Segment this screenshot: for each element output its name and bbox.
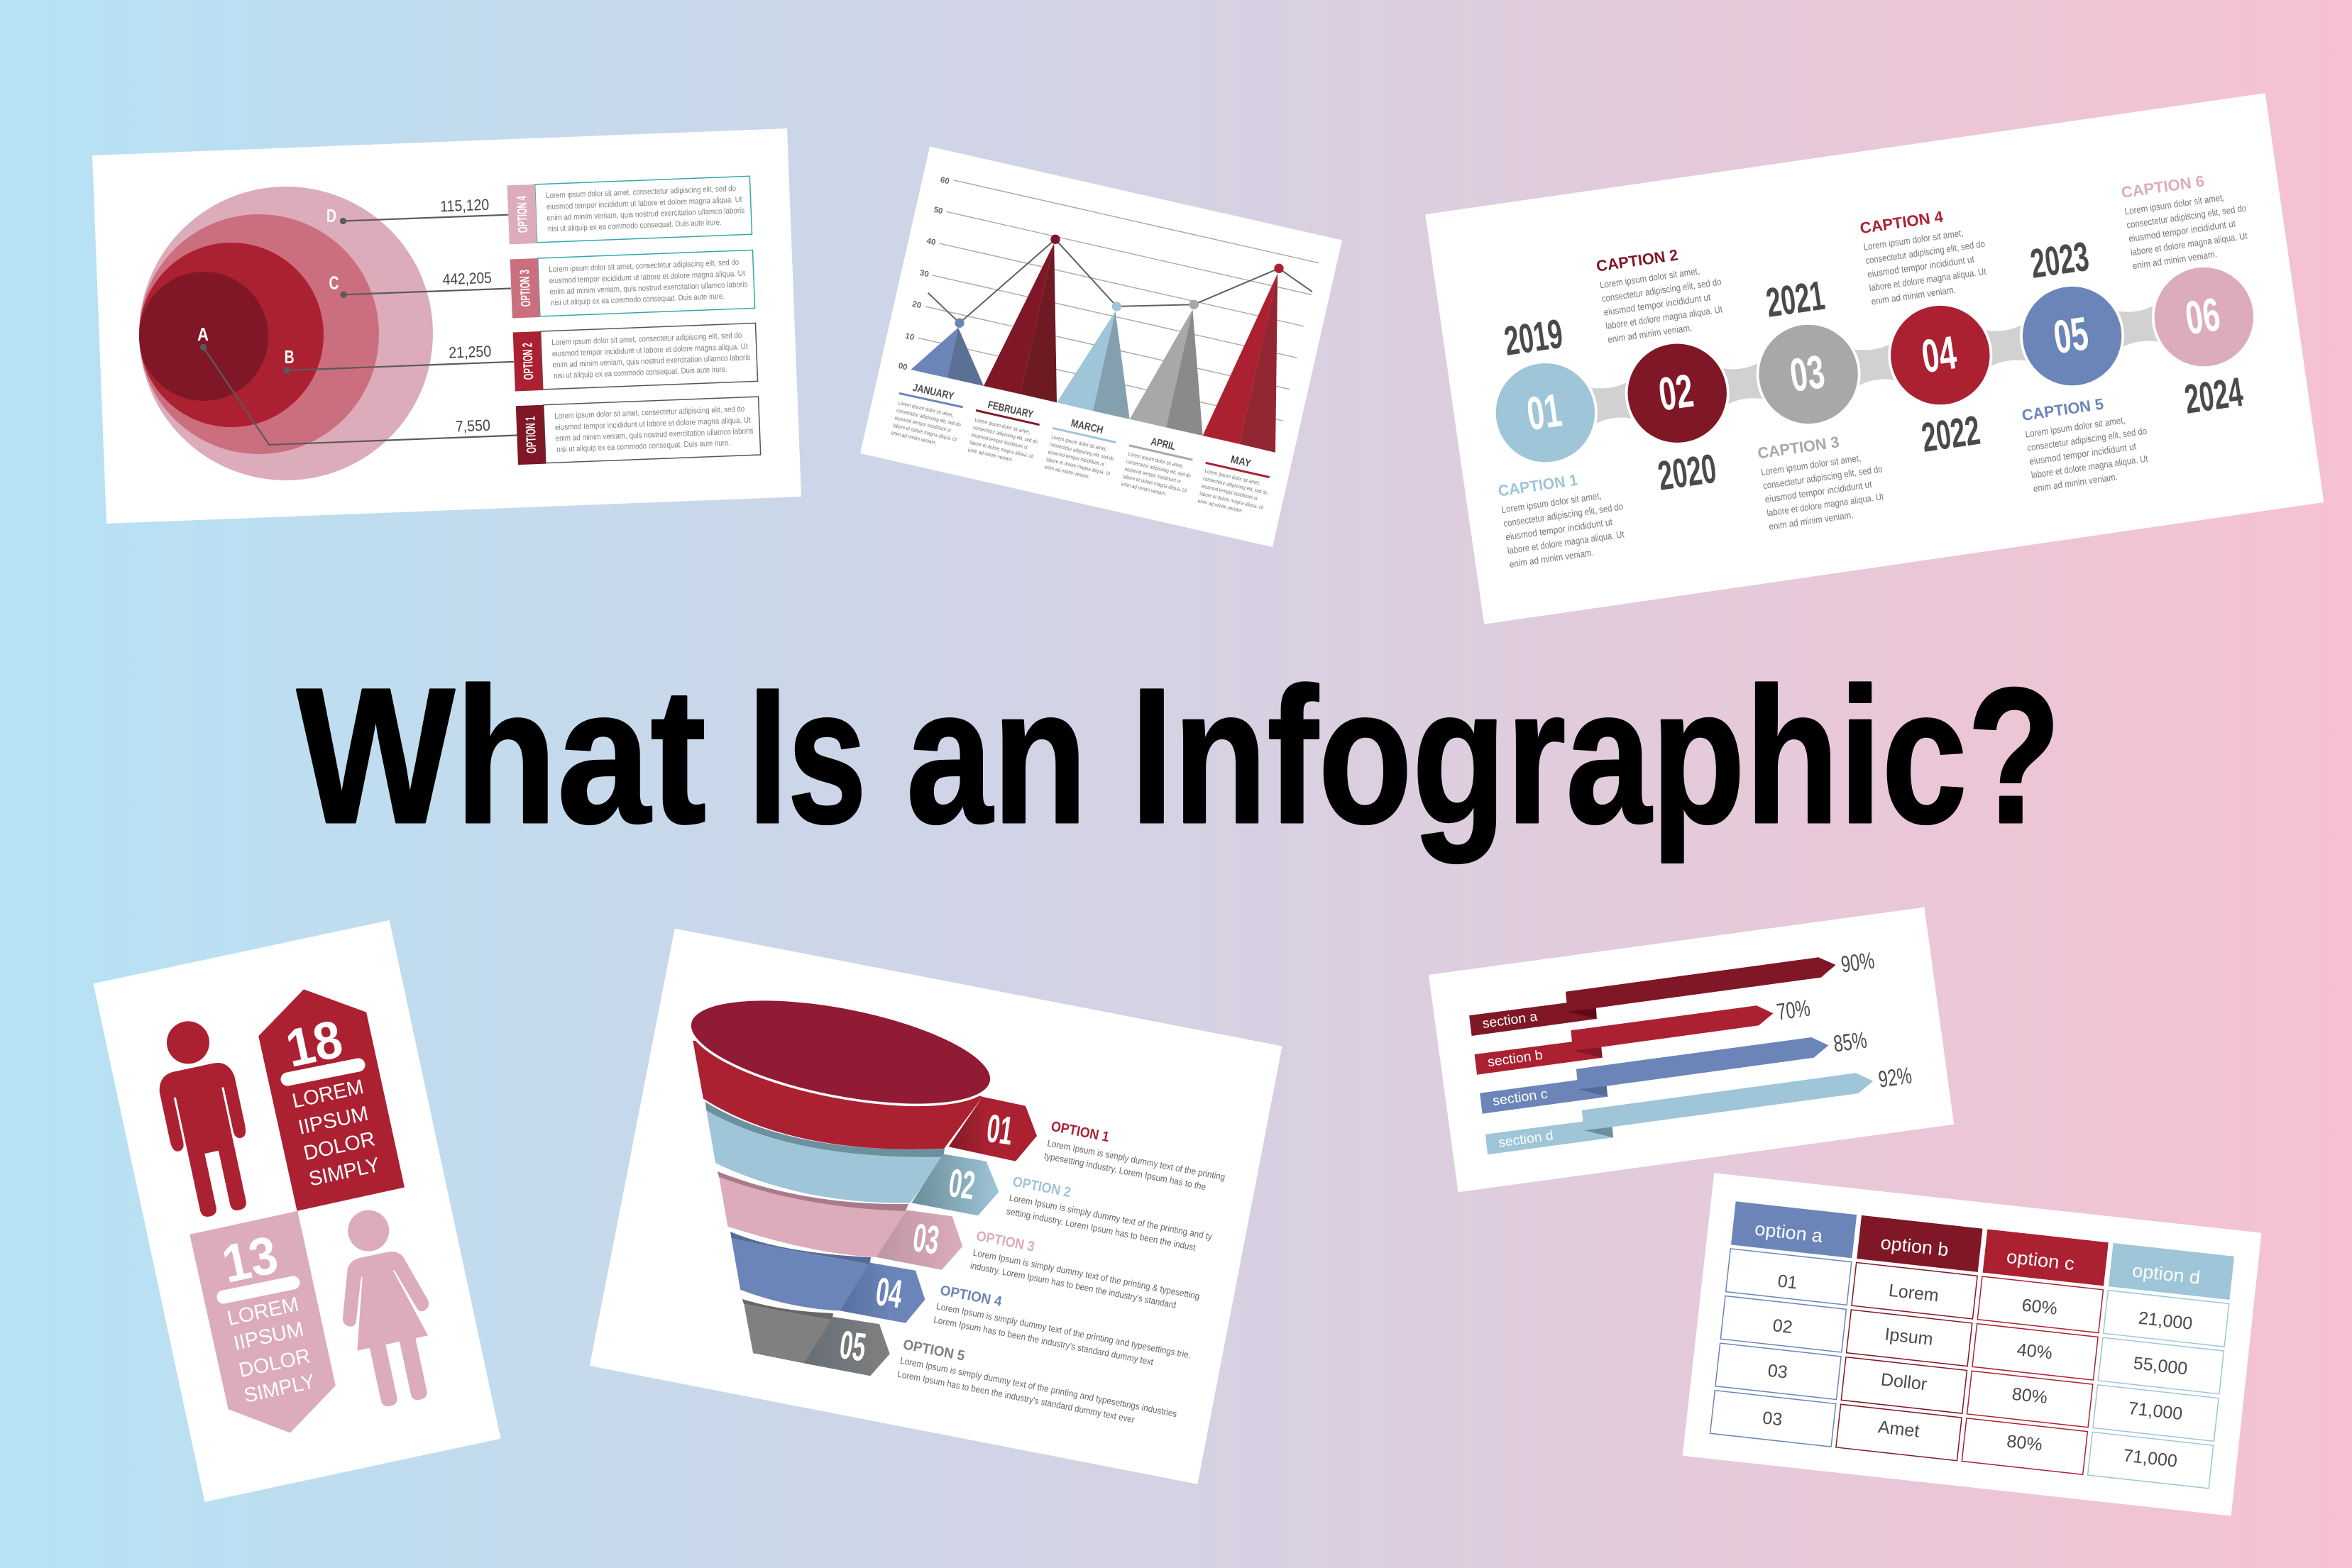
circle B [139, 243, 324, 427]
axis labels [897, 176, 950, 372]
panel: funnel [590, 929, 1282, 1484]
option 4 box [507, 176, 752, 244]
circle letters: C [329, 272, 339, 294]
caption 1: labore et dolore magna aliqua. Ut [1507, 529, 1625, 556]
month: February: enim ad minim veniam. [967, 446, 1013, 463]
tag: 18: 18 [281, 1008, 347, 1078]
option 3 text: industry. Lorem Ipsum has to been the industry's standard [969, 1260, 1177, 1310]
triangle: April [1130, 309, 1203, 436]
option 3 box: Lorem ipsum dolor sit amet, consectetur adipiscing elit, sed do [549, 258, 739, 274]
caption 1: CAPTION 1 [1497, 471, 1579, 500]
month: May: Lorem ipsum dolor sit amet, [1204, 468, 1261, 487]
circle C [139, 214, 379, 454]
caption 5: eiusmod tempor incididunt ut [2028, 441, 2137, 467]
caption 4: enim ad minim veniam. [1871, 285, 1957, 307]
month: May: MAY [1229, 453, 1252, 470]
month: January: consectetur adipiscing elit, sed do [896, 407, 962, 428]
caption 5: labore et dolore magna aliqua. Ut [2030, 453, 2149, 480]
step 04: 04 [1918, 326, 1960, 382]
caption 3: eiusmod tempor incididunt ut [1764, 479, 1873, 504]
month: March: Lorem ipsum dolor sit amet, [1051, 434, 1108, 453]
funnel layer 05: 05 [837, 1322, 869, 1369]
option 2 text: setting industry. Lorem Ipsum has to been the indust [1006, 1205, 1197, 1253]
axis labels: 00 [897, 362, 908, 372]
column: option b: Ipsum [1884, 1325, 1934, 1349]
caption 5: CAPTION 5 [2021, 395, 2105, 424]
month: April: enim ad minim veniam. [1121, 480, 1167, 497]
option 2 box: Lorem ipsum dolor sit amet, consectetur adipiscing elit, sed do [551, 331, 742, 347]
bar: section a [1469, 947, 1876, 1036]
bar: section c: 85% [1832, 1027, 1869, 1057]
bar: section c [1480, 1027, 1869, 1114]
option 4 text: Lorem Ipsum has to been the industry's standard dummy text [933, 1314, 1155, 1367]
caption 4: Lorem ipsum dolor sit amet, [1863, 228, 1964, 253]
step 06 [2152, 265, 2256, 369]
bar: section d: 92% [1876, 1062, 1913, 1093]
column: option d: 71,000 [2127, 1398, 2184, 1424]
caption 2: enim ad minim veniam. [1607, 322, 1693, 345]
option 3 box: nisi ut aliquip ex ea commodo consequat. Duis aute irure. [551, 292, 725, 307]
icon: man [146, 1014, 262, 1221]
column: option a: 01 [1776, 1271, 1798, 1293]
column: option a: option a [1754, 1218, 1824, 1247]
month: January: Lorem ipsum dolor sit amet, [898, 399, 955, 419]
option 2 box: enim ad minim veniam, quis nostrud exercitation ullamco laboris [552, 353, 751, 370]
column: option c: option c [2006, 1246, 2075, 1274]
column: option b: option b [1879, 1232, 1950, 1261]
month: February: FEBRUARY [987, 399, 1034, 421]
value labels: 7,550 [455, 416, 490, 435]
step 04 [1888, 303, 1992, 407]
month: April: consectetur adipiscing elit, sed do [1126, 458, 1192, 479]
month: January: labore et dolore magna aliqua. Ut [892, 422, 958, 443]
circle letters [197, 205, 339, 368]
month: March: consectetur adipiscing elit, sed do [1049, 441, 1115, 462]
caption 5: Lorem ipsum dolor sit amet, [2025, 414, 2126, 440]
caption 4: eiusmod tempor incididunt ut [1867, 254, 1975, 280]
column: option d: 55,000 [2133, 1353, 2189, 1379]
step 06: 06 [2182, 287, 2224, 344]
title: Infographic? [1131, 648, 2061, 864]
option 4 box: OPTION 4 [515, 195, 531, 233]
caption 6: enim ad minim veniam. [2132, 248, 2218, 271]
value labels: 21,250 [449, 342, 492, 362]
circle D [139, 187, 433, 480]
triangle: March [1057, 311, 1130, 419]
column: option b [1836, 1215, 1982, 1461]
caption 2 [1595, 241, 1728, 345]
funnel top ellipse [681, 979, 1000, 1125]
panel: arrow bars [1429, 907, 1954, 1192]
caption 3: labore et dolore magna aliqua. Ut [1766, 491, 1884, 519]
step 02: 02 [1655, 364, 1697, 421]
option 3 box [510, 250, 755, 318]
caption 6: CAPTION 6 [2120, 172, 2206, 201]
value labels: 115,120 [440, 196, 490, 215]
caption 1: consectetur adipiscing elit, sed do [1502, 501, 1624, 529]
option 1 text: typesetting industry. Lorem Ipsum has to the [1043, 1150, 1207, 1192]
column: option c: 60% [2021, 1296, 2058, 1319]
column: option c [1962, 1229, 2109, 1474]
trend line with markers [928, 235, 1312, 328]
bar: section b: 70% [1775, 995, 1812, 1025]
bar: section d [1485, 1062, 1913, 1154]
column: option d [2088, 1243, 2234, 1489]
month: May [1197, 453, 1270, 519]
month: May: labore et dolore magna aliqua. Ut [1199, 490, 1265, 511]
caption 6: Lorem ipsum dolor sit amet, [2124, 192, 2225, 217]
option 2 box [513, 323, 758, 391]
option 4 box: enim ad minim veniam, quis nostrud exercitation ullamco laboris [546, 206, 745, 223]
option 3 text: OPTION 3 [975, 1228, 1036, 1255]
axis labels: 10 [904, 332, 915, 342]
tag: 13: DOLOR [237, 1345, 312, 1382]
tag: 18 [258, 989, 405, 1211]
month: April: eiusmod tempor incididunt ut [1124, 465, 1182, 485]
option 4 text: OPTION 4 [939, 1283, 1004, 1310]
month: March: enim ad minim veniam. [1044, 463, 1090, 480]
caption 6: labore et dolore magna aliqua. Ut [2130, 231, 2248, 258]
month: February: eiusmod tempor incididunt ut [971, 431, 1028, 451]
tag: 13: IIPSUM [231, 1318, 306, 1355]
column: option b: Dollor [1880, 1369, 1928, 1394]
panel: concentric circles [92, 128, 801, 524]
step 03: 03 [1786, 345, 1828, 402]
option 5 text: Lorem Ipsum has to been the industry's standard dummy text ever [896, 1369, 1136, 1425]
step 01 [1493, 360, 1598, 465]
caption 5: enim ad minim veniam. [2033, 471, 2119, 494]
tag: 18: SIMPLY [307, 1154, 382, 1191]
option 1 box [516, 397, 761, 465]
title: What [297, 648, 706, 863]
tag: 18: IIPSUM [296, 1103, 370, 1139]
caption 2: eiusmod tempor incididunt ut [1603, 292, 1711, 318]
option 2 box: nisi ut aliquip ex ea commodo consequat. Duis aute irure. [554, 365, 727, 380]
circle A [139, 272, 268, 401]
years: 2022 [1918, 407, 1983, 461]
month: April [1121, 436, 1193, 502]
month: March: labore et dolore magna aliqua. Ut [1045, 456, 1111, 477]
step 03 [1757, 322, 1861, 426]
column: option d: option d [2131, 1259, 2202, 1288]
funnel layer 04 [730, 1232, 925, 1323]
funnel layer 03: 03 [911, 1215, 942, 1262]
option 1 text [1043, 1119, 1226, 1192]
option 1 box: OPTION 1 [523, 416, 539, 453]
column: option a [1710, 1201, 1857, 1447]
column: option d: 71,000 [2122, 1445, 2178, 1472]
option 3 box: enim ad minim veniam, quis nostrud exercitation ullamco laboris [549, 280, 748, 297]
option 1 box: Lorem ipsum dolor sit amet, consectetur adipiscing elit, sed do [554, 405, 744, 421]
step 01: 01 [1524, 383, 1565, 440]
caption 4: CAPTION 4 [1859, 207, 1945, 237]
caption 6 [2120, 167, 2253, 272]
step 05 [2020, 284, 2124, 388]
tag: 18: LOREM [290, 1076, 366, 1113]
month: April: APRIL [1150, 436, 1177, 453]
tag: 13: 13 [217, 1224, 282, 1294]
circle letters: D [326, 205, 336, 226]
years [1502, 233, 2246, 499]
column: option c: 80% [2011, 1384, 2048, 1408]
option 3 text [969, 1228, 1201, 1310]
month: February: labore et dolore magna aliqua. Ut [969, 439, 1035, 460]
caption 4: consectetur adipiscing elit, sed do [1864, 238, 1986, 266]
funnel layer 04: 04 [874, 1269, 905, 1316]
triangle: May [1203, 273, 1277, 453]
caption 3: consectetur adipiscing elit, sed do [1762, 463, 1883, 491]
column: option b: Amet [1877, 1417, 1920, 1442]
month: May: enim ad minim veniam. [1197, 497, 1243, 514]
step 02 [1625, 341, 1730, 446]
option 1 text: OPTION 1 [1050, 1119, 1111, 1145]
value labels: 442,205 [442, 269, 492, 288]
panel: male and female stats [94, 920, 501, 1502]
panel: timeline [1425, 93, 2324, 624]
leader lines [200, 215, 517, 445]
title: an [906, 648, 1087, 863]
month: March: MARCH [1070, 417, 1104, 436]
option 3 text: Lorem Ipsum is simply dummy text of the printing & typesetting [972, 1247, 1201, 1301]
column: option c: 80% [2006, 1431, 2043, 1455]
caption 3: enim ad minim veniam. [1768, 509, 1854, 532]
caption 2: Lorem ipsum dolor sit amet, [1599, 265, 1700, 290]
column: option a: 03 [1762, 1408, 1784, 1430]
option 2 box: eiusmod tempor incididunt ut labore et dolore magna aliqua. Ut [552, 343, 749, 358]
tag: 13: SIMPLY [242, 1370, 317, 1408]
timeline connectors [1590, 306, 2160, 424]
axis labels: 60 [940, 176, 950, 186]
funnel layer 01 [693, 1041, 1037, 1161]
caption 4: labore et dolore magna aliqua. Ut [1869, 266, 1987, 293]
axis labels: 40 [925, 237, 936, 247]
caption 2: labore et dolore magna aliqua. Ut [1605, 304, 1723, 331]
bar: section d: section d [1498, 1128, 1554, 1151]
title: Is [748, 648, 867, 863]
tag: 13 [189, 1211, 336, 1433]
funnel layer 02: 02 [946, 1160, 978, 1208]
option 2 box: OPTION 2 [520, 343, 537, 380]
caption 5 [2021, 390, 2153, 495]
years: 2019 [1502, 311, 1566, 365]
option 4 text: Lorem Ipsum is simply dummy text of the printing and typesettings trie. [935, 1301, 1192, 1361]
funnel layer 05 [742, 1299, 890, 1376]
tag: 13: LOREM [225, 1293, 301, 1330]
option 2 text: OPTION 2 [1011, 1174, 1072, 1200]
panel: triangle chart [860, 146, 1342, 547]
years: 2023 [2028, 233, 2092, 287]
caption 1: eiusmod tempor incididunt ut [1505, 517, 1613, 543]
option 4 box: eiusmod tempor incididunt ut labore et dolore magna aliqua. Ut [546, 196, 743, 211]
caption 1: enim ad minim veniam. [1509, 547, 1595, 570]
triangle: January [911, 328, 984, 386]
tag: 18: DOLOR [302, 1127, 377, 1165]
option 5 text: Lorem Ipsum is simply dummy text of the printing and typesettings industries [899, 1355, 1178, 1419]
month: January: eiusmod tempor incididunt ut [894, 414, 952, 434]
month: January [891, 382, 963, 451]
option 2 text [1006, 1174, 1214, 1253]
caption 6: eiusmod tempor incididunt ut [2128, 218, 2236, 244]
month: May: eiusmod tempor incididunt ut [1201, 482, 1258, 502]
option 1 box: nisi ut aliquip ex ea commodo consequat. Duis aute irure. [556, 439, 730, 454]
month: March: eiusmod tempor incididunt ut [1048, 448, 1105, 468]
icon: woman [322, 1201, 449, 1412]
bar: section b [1475, 995, 1812, 1075]
option 4 box: Lorem ipsum dolor sit amet, consectetur adipiscing elit, sed do [546, 184, 736, 200]
option 1 text: Lorem Ipsum is simply dummy text of the printing [1046, 1137, 1226, 1183]
month: February: consectetur adipiscing elit, sed do [972, 424, 1038, 445]
bar: section c: section c [1492, 1087, 1549, 1109]
step 05: 05 [2050, 307, 2092, 363]
caption 3 [1757, 427, 1889, 532]
bar: section b: section b [1487, 1048, 1544, 1070]
axis labels: 30 [919, 269, 930, 279]
caption 6: consectetur adipiscing elit, sed do [2126, 203, 2247, 231]
title [297, 648, 2061, 864]
column: option b: Lorem [1888, 1281, 1940, 1305]
option 2 text: Lorem Ipsum is simply dummy text of the printing and ty [1009, 1192, 1214, 1242]
caption 2: consectetur adipiscing elit, sed do [1601, 276, 1722, 304]
option 1 box: eiusmod tempor incididunt ut labore et dolore magna aliqua. Ut [555, 416, 752, 432]
month: January: JANUARY [911, 382, 955, 402]
triangle: February [984, 243, 1057, 402]
option 3 box: eiusmod tempor incididunt ut labore et dolore magna aliqua. Ut [549, 270, 746, 285]
funnel layer 02 [705, 1102, 999, 1215]
caption 2: CAPTION 2 [1595, 245, 1679, 275]
month: February: Lorem ipsum dolor sit amet, [974, 416, 1031, 436]
bar: section a: 90% [1840, 947, 1876, 978]
column: option a: 02 [1771, 1315, 1793, 1337]
month: February [967, 399, 1040, 468]
month: May: consectetur adipiscing elit, sed do [1202, 475, 1268, 496]
option 4 box: nisi ut aliquip ex ea commodo consequat. Duis aute irure. [548, 219, 722, 233]
years: 2024 [2182, 369, 2246, 423]
option 3 box: OPTION 3 [517, 270, 534, 307]
option 1 box: enim ad minim veniam, quis nostrud exercitation ullamco laboris [555, 427, 754, 443]
caption 4 [1859, 202, 1991, 307]
column: option a: 03 [1766, 1361, 1788, 1383]
caption 1 [1497, 465, 1630, 570]
funnel layer 03 [718, 1171, 962, 1270]
option 5 text: OPTION 5 [902, 1337, 966, 1364]
axis labels: 50 [933, 206, 944, 216]
panel: table [1683, 1173, 2261, 1516]
years: 2020 [1655, 446, 1719, 499]
caption 1: Lorem ipsum dolor sit amet, [1501, 490, 1602, 515]
month: January: enim ad minim veniam. [891, 429, 937, 446]
month: March [1044, 417, 1116, 485]
value labels [440, 196, 492, 435]
years: 2021 [1764, 272, 1828, 326]
funnel layer 01: 01 [984, 1105, 1016, 1153]
month: April: labore et dolore magna aliqua. Ut [1122, 473, 1188, 494]
circle letters: B [285, 346, 295, 368]
caption 3: CAPTION 3 [1757, 433, 1840, 462]
caption 3: Lorem ipsum dolor sit amet, [1760, 453, 1862, 477]
column: option d: 21,000 [2138, 1308, 2194, 1334]
month: April: Lorem ipsum dolor sit amet, [1128, 451, 1185, 470]
caption 5: consectetur adipiscing elit, sed do [2026, 426, 2148, 453]
circle letters: A [197, 324, 209, 345]
column: option c: 40% [2016, 1340, 2053, 1363]
grid lines [918, 180, 1319, 421]
axis labels: 20 [911, 300, 922, 310]
bar: section a: section a [1481, 1010, 1539, 1032]
